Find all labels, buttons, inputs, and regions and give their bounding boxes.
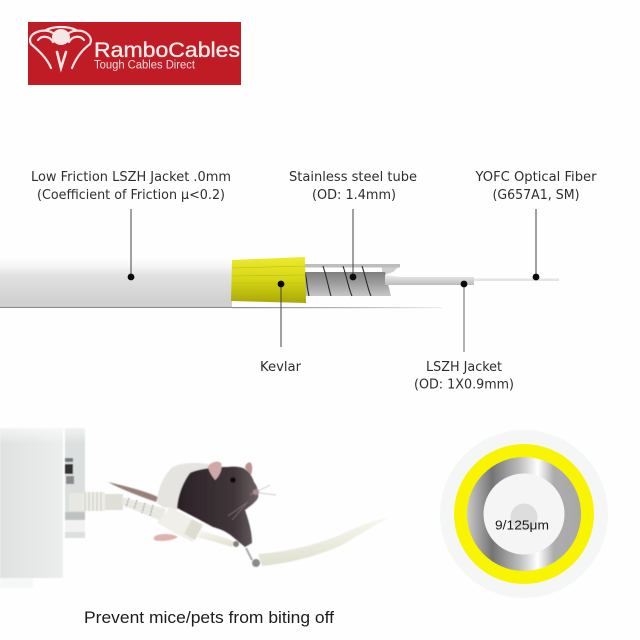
mouse ears <box>208 462 222 480</box>
severed white cable <box>252 518 388 567</box>
caption: Prevent mice/pets from biting off <box>84 609 334 627</box>
device box <box>0 418 90 588</box>
optical fiber <box>474 278 559 281</box>
callout: steel tube: (OD: 1.4mm) <box>312 188 396 203</box>
callout: optical fiber: (G657A1, SM) <box>492 188 580 203</box>
callout: LSZH jacket: LSZH Jacket <box>426 360 502 375</box>
kevlar layer <box>231 257 306 303</box>
mouse eye <box>230 477 236 483</box>
mouse nose <box>253 489 259 495</box>
icon: muscle arms logo <box>30 27 91 68</box>
logo <box>28 22 241 85</box>
outer jacket <box>0 258 232 308</box>
core label: 9/125μm <box>495 518 549 532</box>
callout: kevlar <box>260 281 302 375</box>
shadow under cable <box>232 307 442 308</box>
callout: LSZH jacket <box>414 281 514 392</box>
callout: LSZH jacket: (OD: 1X0.9mm) <box>414 378 514 392</box>
callout: jacket: Low Friction LSZH Jacket .0mm <box>31 170 231 185</box>
brand name: RamboCables <box>94 39 240 62</box>
ethernet plug <box>69 492 166 521</box>
mouse dark body <box>177 467 258 547</box>
callout: jacket: (Coefficient of Friction μ<0.2) <box>37 188 225 203</box>
callout: kevlar: Kevlar <box>260 360 302 375</box>
cable cutaway <box>0 257 559 308</box>
chewed plug <box>157 507 252 560</box>
callout: optical fiber <box>474 170 597 280</box>
callout: steel tube: Stainless steel tube <box>289 170 417 185</box>
mouse whiskers <box>228 485 276 520</box>
callout: optical fiber: YOFC Optical Fiber <box>474 170 597 185</box>
mouse white saddle <box>157 463 213 510</box>
callout: jacket <box>31 170 231 280</box>
mouse paw <box>154 534 178 541</box>
fiber cross-section diagram <box>440 430 608 598</box>
tagline: Tough Cables Direct <box>94 60 196 72</box>
photo: mouse biting cable <box>0 418 388 588</box>
mouse tail <box>108 482 158 502</box>
stainless steel tube <box>305 264 400 296</box>
icon: logo head <box>52 29 70 45</box>
inner LSZH jacket <box>385 275 474 285</box>
callout: steel tube <box>289 170 417 280</box>
